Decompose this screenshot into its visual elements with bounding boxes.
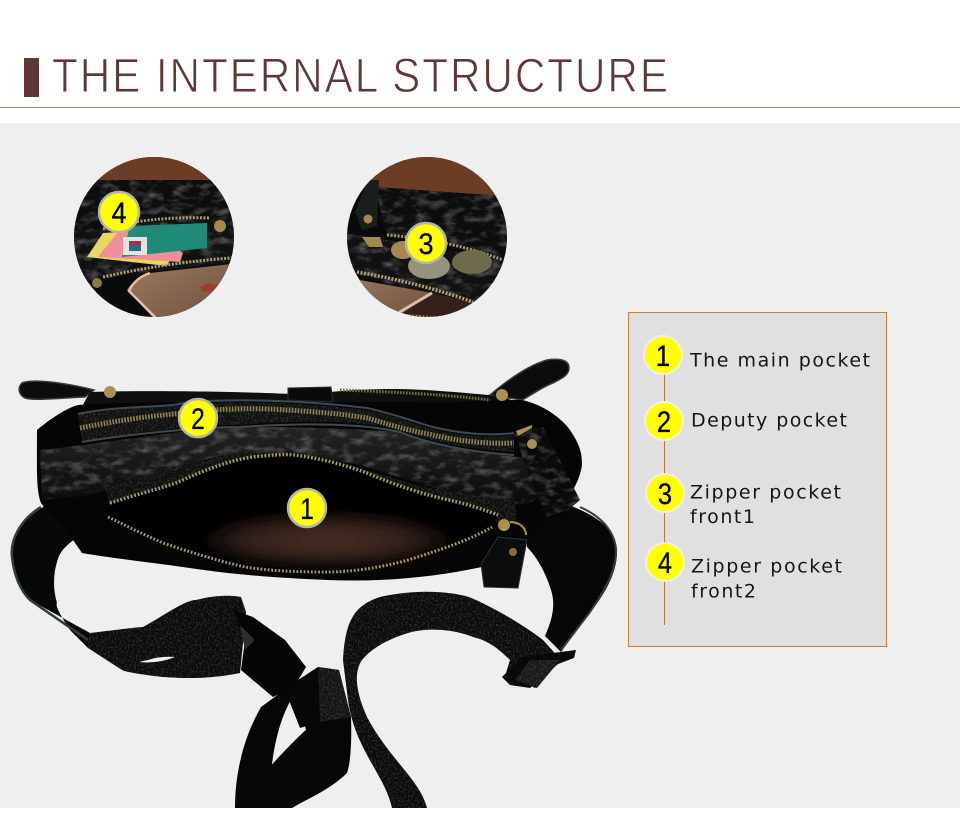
legend item 1: 1	[656, 339, 670, 372]
pink card	[98, 230, 183, 262]
upper zipper tape	[78, 402, 514, 452]
hardware: rivets and zipper pulls	[104, 386, 537, 556]
marker 1 on bag	[288, 489, 326, 527]
lower leather tab	[481, 537, 527, 588]
legend item 4	[646, 543, 842, 602]
right top loop tab	[490, 359, 569, 400]
legend item 4: Zipper pocket	[691, 556, 842, 578]
top centre clasp	[288, 387, 333, 402]
green card	[122, 223, 207, 257]
rear of bag	[80, 389, 540, 410]
right leather waist strap	[525, 500, 617, 652]
legend item 2: 2	[657, 405, 671, 438]
legend panel	[628, 312, 886, 646]
coins	[452, 250, 492, 274]
title bar	[24, 48, 668, 103]
rear zipper teeth	[340, 390, 490, 400]
bag photo	[11, 359, 617, 808]
main pocket zipper upper teeth	[110, 455, 498, 515]
circular detail photo: card pocket	[74, 157, 234, 317]
title marker	[24, 58, 39, 97]
left leather waist strap	[11, 498, 90, 648]
marker 2 on bag	[179, 399, 217, 437]
upper zipper teeth	[80, 409, 514, 443]
title: THE INTERNAL STRUCTURE	[52, 48, 668, 103]
leather tab	[355, 180, 379, 230]
left top loop tab	[19, 381, 94, 399]
legend item 2: Deputy pocket	[691, 410, 847, 432]
legend item 1	[644, 336, 870, 374]
front leather panel	[40, 427, 555, 505]
left webbing strap	[88, 596, 246, 678]
legend item 2	[645, 402, 847, 440]
pocket lining	[197, 511, 457, 565]
yellow card	[87, 232, 172, 266]
main pocket mesh	[106, 453, 517, 525]
marker 4 on detail photo	[99, 192, 139, 232]
legend item 4: 4	[658, 546, 672, 579]
marker 1 on bag: 1	[300, 492, 314, 526]
main pocket opening	[108, 455, 498, 572]
legend item 3: 3	[658, 477, 672, 510]
main pocket zipper lower teeth	[108, 517, 492, 572]
marker 4 on detail photo: 4	[111, 197, 127, 230]
lower straps	[235, 667, 351, 808]
webbing through buckle	[515, 660, 560, 688]
legend item 3: Zipper pocket	[690, 482, 841, 504]
marker 2 on bag: 2	[191, 402, 205, 436]
phone	[127, 264, 230, 317]
legend item 1: The main pocket	[689, 350, 870, 372]
legend item 4: front2	[691, 580, 756, 602]
bag body	[37, 400, 582, 580]
right long webbing strap	[343, 592, 561, 808]
front right leather tab	[514, 427, 580, 517]
marker 3 on detail photo	[406, 223, 446, 263]
legend item 3: front1	[690, 506, 755, 528]
marker 3 on detail photo: 3	[418, 228, 434, 261]
centre plastic buckle	[233, 610, 306, 697]
right strap buckle	[502, 650, 576, 688]
legend item 3	[646, 474, 841, 528]
circular detail photo: coin pocket	[347, 157, 507, 317]
